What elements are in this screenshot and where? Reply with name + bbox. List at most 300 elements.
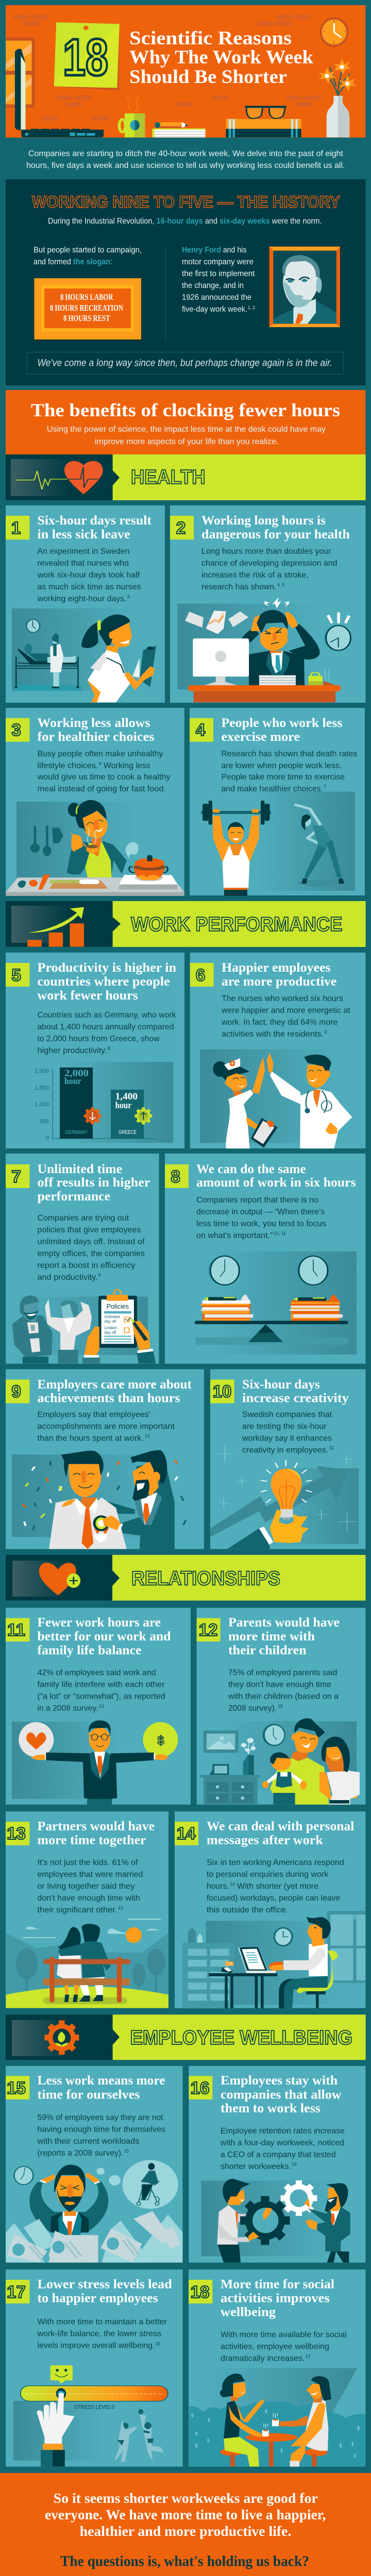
section title: RELATIONSHIPS bbox=[131, 1568, 280, 1590]
panel: card 12 bbox=[197, 1608, 366, 1805]
body text: family life interfere with each other bbox=[37, 1681, 165, 1689]
number badge bbox=[6, 516, 29, 539]
y axis labels: 1,500 bbox=[35, 1085, 49, 1091]
heading: We can deal with personal bbox=[207, 1820, 354, 1834]
body text bbox=[37, 1214, 145, 1282]
heading bbox=[37, 2278, 172, 2306]
body text bbox=[196, 1196, 326, 1240]
bar: Greece bbox=[111, 1090, 144, 1139]
number badge: 2 bbox=[176, 518, 185, 537]
body text: don't have enough time with bbox=[37, 1894, 140, 1903]
icon: heart with pulse bbox=[15, 461, 103, 494]
heading: We can do the same bbox=[196, 1162, 306, 1176]
heading bbox=[37, 961, 176, 1003]
title: Scientific Reasons bbox=[129, 28, 292, 49]
body text: Six in ten working Americans respond bbox=[207, 1858, 344, 1867]
body text: than the hours spent at work. bbox=[37, 1434, 144, 1443]
body text: It's not just the kids. 61% of bbox=[37, 1858, 138, 1867]
body text bbox=[221, 994, 350, 1039]
slogan lead text bbox=[33, 246, 142, 266]
section banner: employee wellbeing bbox=[6, 2014, 366, 2060]
body text: work. In fact, they did 64% more bbox=[221, 1018, 338, 1027]
y axis labels: 1,000 bbox=[35, 1101, 49, 1108]
body text bbox=[201, 547, 337, 591]
body text: 15 bbox=[118, 1905, 123, 1911]
heading: time for ourselves bbox=[37, 2088, 140, 2102]
heading: more time with bbox=[228, 1630, 315, 1643]
heading: dangerous for your health bbox=[201, 528, 350, 541]
number badge bbox=[197, 1618, 221, 1641]
number badge: 18 bbox=[191, 2282, 209, 2301]
illustration: light bulb idea bbox=[210, 1446, 359, 1549]
number badge bbox=[190, 718, 213, 742]
body text: Companies are trying out bbox=[37, 1214, 129, 1223]
panel: card 10 bbox=[210, 1369, 366, 1549]
body text: 15 bbox=[278, 1704, 283, 1709]
illustration: stress level slider bbox=[13, 2365, 168, 2467]
number badge: 16 bbox=[191, 2078, 209, 2097]
illustration: stress level slider: STRESS LEVELS bbox=[74, 2404, 114, 2411]
heading: Unlimited time bbox=[37, 1162, 122, 1176]
number badge: 13 bbox=[7, 1824, 26, 1843]
heading: Happier employees bbox=[222, 961, 331, 975]
illustration: employees and policy clipboard: day off bbox=[104, 1330, 116, 1335]
heading bbox=[37, 1616, 171, 1657]
body text: 75% of employed parents said bbox=[228, 1669, 337, 1677]
number badge: 6 bbox=[196, 965, 205, 985]
body text: are lower when people work less. bbox=[221, 761, 342, 770]
intro text: hours, five days a week and use science to tell us why working less could benefit us all. bbox=[26, 161, 345, 170]
closing question: The questions is, what's holding us back? bbox=[60, 2554, 309, 2570]
number badge bbox=[6, 1380, 29, 1403]
heading: Productivity is higher in bbox=[37, 961, 176, 975]
number badge: 9 bbox=[11, 1382, 21, 1401]
body text: revealed that nurses who bbox=[37, 559, 129, 568]
Henry Ford text: 1926 announced the bbox=[182, 293, 251, 302]
body text: work six-hour days took half bbox=[37, 571, 140, 580]
heading bbox=[37, 514, 152, 541]
number badge bbox=[210, 1380, 234, 1403]
panel: history bbox=[6, 179, 366, 385]
heading: are more productive bbox=[222, 975, 336, 989]
heading: More time for social bbox=[221, 2278, 334, 2292]
number badge bbox=[189, 2076, 212, 2099]
number badge bbox=[6, 1822, 29, 1845]
panel: card 4 bbox=[190, 708, 365, 896]
body text bbox=[37, 1011, 176, 1055]
body text: employees that were married bbox=[37, 1870, 143, 1879]
heading bbox=[37, 1820, 155, 1848]
title bbox=[129, 28, 313, 88]
bar: Germany: GERMANY bbox=[65, 1129, 88, 1136]
body text bbox=[37, 1411, 175, 1443]
panel: card 7 bbox=[6, 1154, 159, 1364]
illustration: man balancing heart and money: $ bbox=[157, 1734, 164, 1748]
heading: wellbeing bbox=[221, 2306, 276, 2319]
body text: With more time to maintain a better bbox=[37, 2318, 167, 2327]
body text: lifestyle choices. bbox=[37, 761, 98, 770]
heading bbox=[201, 514, 350, 541]
illustration: man at laptop with phone bbox=[182, 1911, 365, 2008]
subheading: improve more aspects of your life than you realize. bbox=[95, 437, 278, 446]
heading: working nine to five: WORKING NINE TO FIVE — THE HISTORY bbox=[32, 193, 340, 211]
body text: Countries such as Germany, who work bbox=[37, 1011, 176, 1020]
heading: in less sick leave bbox=[37, 528, 130, 541]
heading bbox=[242, 1378, 349, 1405]
heading: more time together bbox=[37, 1834, 146, 1848]
body text: with their children (based on a bbox=[228, 1692, 339, 1701]
heading: Less work means more bbox=[37, 2074, 165, 2088]
conclusion text: healthier and more productive life. bbox=[80, 2523, 291, 2539]
body text: activities, employee wellbeing bbox=[221, 2343, 329, 2351]
heading bbox=[37, 2074, 165, 2102]
body text bbox=[221, 2331, 347, 2363]
panel: card 16 bbox=[189, 2066, 366, 2263]
heading bbox=[221, 716, 343, 744]
body text: 7 bbox=[324, 784, 326, 790]
panel: card 9 bbox=[6, 1369, 204, 1549]
title: Should Be Shorter bbox=[129, 66, 287, 88]
section title: EMPLOYEE WELLBEING bbox=[130, 2027, 352, 2049]
body text: with a four-day workweek, noticed bbox=[220, 2139, 344, 2147]
Henry Ford text: five-day work week. bbox=[182, 305, 247, 314]
y axis labels: 500 bbox=[40, 1118, 49, 1125]
heading bbox=[228, 1616, 340, 1657]
section banner: health bbox=[6, 454, 366, 500]
intro text bbox=[26, 149, 345, 170]
quote box bbox=[27, 352, 343, 374]
bar: Greece: GREECE bbox=[119, 1129, 137, 1136]
body text: 2008 survey). bbox=[228, 1704, 277, 1713]
bar chart: annual hours Germany vs Greece bbox=[35, 1062, 173, 1143]
number badge: 4 bbox=[196, 720, 206, 739]
subheading bbox=[47, 425, 326, 446]
heading: increase creativity bbox=[242, 1392, 349, 1405]
slogan box: 8 HOURS LABOR bbox=[60, 292, 113, 302]
heading bbox=[222, 961, 336, 989]
body text: 16 bbox=[156, 2341, 161, 2347]
section banner: work performance bbox=[6, 901, 366, 947]
conclusion text: everyone. We have more time to live a happier, bbox=[45, 2507, 326, 2522]
illustration: nurse and doctor high five bbox=[200, 1049, 352, 1148]
number badge bbox=[190, 963, 214, 987]
panel: card 8 bbox=[165, 1154, 366, 1364]
body text: activities with the residents. bbox=[222, 1030, 324, 1039]
body text: 8 bbox=[107, 1046, 110, 1052]
body text: hours. bbox=[207, 1882, 229, 1891]
bar: Greece: 1,400 bbox=[115, 1091, 138, 1102]
heading bbox=[37, 1378, 192, 1405]
heading: performance bbox=[37, 1190, 110, 1204]
heading: for healthier choices bbox=[37, 730, 155, 744]
body text: People take more time to exercise bbox=[221, 773, 345, 782]
body text: they don't have enough time bbox=[228, 1681, 331, 1689]
number badge: 17 bbox=[7, 2282, 26, 2301]
panel: card 17 bbox=[6, 2269, 182, 2467]
body text: higher productivity. bbox=[37, 1046, 107, 1055]
y axis labels bbox=[35, 1068, 49, 1141]
body text: empty offices, the companies bbox=[37, 1249, 145, 1258]
y axis labels: 2,000 bbox=[35, 1068, 49, 1074]
heading: People who work less bbox=[221, 716, 343, 730]
panel: header bbox=[6, 5, 366, 138]
portrait: Henry Ford bbox=[269, 247, 340, 327]
body text: policies that give employees bbox=[37, 1226, 141, 1234]
number badge bbox=[6, 2280, 29, 2303]
body text: 59% of employees say they are not bbox=[37, 2113, 163, 2122]
illustration: couple on a bench bbox=[6, 1919, 168, 2008]
number badge: 8 bbox=[171, 1167, 180, 1186]
Henry Ford text: the change, and in bbox=[182, 281, 244, 290]
heading: companies that allow bbox=[221, 2088, 342, 2102]
heading: Lower stress levels lead bbox=[37, 2278, 172, 2292]
body text bbox=[220, 2127, 345, 2171]
heading: to happier employees bbox=[37, 2292, 158, 2306]
body text: a CEO of a company that tested bbox=[221, 2150, 336, 2159]
body text bbox=[37, 2113, 165, 2158]
section title: HEALTH bbox=[131, 466, 205, 488]
body text: 3 bbox=[324, 1029, 327, 1035]
body text bbox=[221, 750, 357, 793]
heading bbox=[221, 2074, 342, 2115]
bar: Germany: 2,000 bbox=[64, 1068, 89, 1079]
body text bbox=[37, 1858, 143, 1914]
number badge: 10 bbox=[213, 1382, 231, 1401]
body text: With shorter (yet more bbox=[237, 1882, 318, 1891]
body text: unlimited days off. Instead of bbox=[37, 1238, 145, 1246]
body text: Working less bbox=[104, 761, 150, 770]
body text: (reports a 2008 survey). bbox=[37, 2149, 124, 2158]
number badge: 12 bbox=[199, 1620, 217, 1639]
heading: Working less allows bbox=[37, 716, 150, 730]
body text: creativity in employees. bbox=[242, 1446, 328, 1455]
body text: accomplishments are more important bbox=[37, 1422, 175, 1431]
illustration: people exercising bbox=[201, 792, 355, 896]
heading: off results in higher bbox=[37, 1176, 150, 1190]
body text: 15 bbox=[292, 2162, 297, 2167]
illustration: office desk scene bbox=[6, 15, 357, 138]
heading: Parents would have bbox=[228, 1616, 340, 1630]
panel: card 11 bbox=[6, 1608, 191, 1805]
body text: decrease in output — “When there's bbox=[196, 1208, 325, 1216]
body text: working eight-hour days. bbox=[37, 595, 126, 603]
heading: Six-hour days bbox=[242, 1378, 320, 1392]
panel: card 14 bbox=[175, 1811, 366, 2008]
heading: countries where people bbox=[37, 975, 170, 989]
Henry Ford text bbox=[182, 246, 255, 314]
body text: 14 bbox=[230, 1882, 235, 1887]
icons: productivity gears bbox=[84, 1107, 152, 1125]
body text bbox=[37, 1669, 165, 1713]
heading: amount of work in six hours bbox=[196, 1176, 356, 1190]
body text: this outside the office. bbox=[207, 1906, 288, 1914]
body text: 3 bbox=[127, 594, 130, 600]
heading: The benefits of clocking fewer hours bbox=[31, 400, 340, 420]
illustration: man buried in paperwork bbox=[6, 2160, 183, 2263]
body text: An experiment in Sweden bbox=[37, 547, 130, 556]
heading: exercise more bbox=[221, 730, 300, 744]
Henry Ford text: the first to implement bbox=[182, 269, 255, 278]
title: Why The Work Week bbox=[129, 47, 313, 68]
panel: card 18 bbox=[189, 2269, 366, 2467]
illustration: employees and policy clipboard: Limited bbox=[104, 1325, 116, 1330]
illustration: woman cooking bbox=[6, 800, 184, 896]
number badge: 3 bbox=[11, 720, 21, 739]
body text: on what's important.” bbox=[196, 1231, 273, 1240]
illustration: employees and policy clipboard: Unlimited bbox=[104, 1314, 120, 1319]
body text: increases the risk of a stroke, bbox=[201, 571, 309, 580]
body text: Employers say that employees' bbox=[37, 1411, 150, 1419]
quote box: We've come a long way since then, but perhaps change again is in the air. bbox=[37, 358, 332, 369]
body text: Busy people often make unhealthy bbox=[37, 750, 163, 758]
slogan box: 8 HOURS REST bbox=[63, 313, 110, 323]
number badge bbox=[6, 2076, 29, 2099]
body text: chance of developing depression and bbox=[201, 559, 337, 568]
number badge: 15 bbox=[7, 2078, 26, 2097]
heading: Fewer work hours are bbox=[37, 1616, 161, 1630]
slogan lead text: But people started to campaign, bbox=[33, 246, 142, 255]
heading: them to work less bbox=[221, 2102, 321, 2115]
body text: less time to work, you tend to focus bbox=[196, 1219, 326, 1228]
illustration: nurse and patient bbox=[12, 608, 156, 702]
body text: Companies report that there is no bbox=[196, 1196, 318, 1205]
body text: Employee retention rates increase bbox=[221, 2127, 345, 2136]
body text: 9 bbox=[98, 1273, 101, 1278]
panel: card 2 bbox=[170, 505, 366, 703]
number badge: 7 bbox=[11, 1167, 21, 1186]
section banner: relationships bbox=[6, 1555, 366, 1601]
heading bbox=[207, 1820, 354, 1848]
body text: (“a lot” or “somewhat”), as reported bbox=[37, 1692, 165, 1701]
bar: Greece: hour bbox=[115, 1100, 131, 1110]
body text: as much sick time as nurses bbox=[37, 583, 141, 591]
heading: Working long hours is bbox=[201, 514, 326, 528]
illustration: employees and policy clipboard: day off bbox=[104, 1319, 116, 1324]
number badge: 11 bbox=[7, 1620, 25, 1639]
panel: card 3 bbox=[6, 708, 184, 896]
panel: card 13 bbox=[6, 1811, 168, 2008]
panel: card 5 bbox=[6, 953, 184, 1148]
heading bbox=[37, 716, 155, 744]
body text: workday say it enhances bbox=[242, 1434, 332, 1443]
heading: work fewer hours bbox=[37, 989, 138, 1003]
conclusion text bbox=[45, 2490, 326, 2539]
heading: Six-hour days result bbox=[37, 514, 152, 528]
body text: to 2,000 hours from Greece, show bbox=[37, 1035, 160, 1043]
icon: heart with plus bbox=[39, 1563, 80, 1596]
illustration: family at home bbox=[200, 1718, 360, 1805]
heading: Partners would have bbox=[37, 1820, 155, 1834]
body text: 13 bbox=[99, 1704, 104, 1709]
body text: about 1,400 hours annually compared bbox=[37, 1023, 174, 1031]
number badge: 14 bbox=[177, 1824, 196, 1843]
body text: 4, 5 bbox=[277, 582, 284, 588]
body text: were happier and more energetic at bbox=[221, 1006, 350, 1015]
heading: better for our work and bbox=[37, 1630, 171, 1643]
panel: card 1 bbox=[6, 505, 165, 703]
body text bbox=[37, 547, 141, 603]
y axis labels: 0 bbox=[46, 1135, 49, 1141]
body text: Long hours more than doubles your bbox=[201, 547, 331, 556]
body text: report a boost in efficiency bbox=[37, 1261, 135, 1270]
illustration: scale balancing work bbox=[194, 1251, 357, 1354]
body text: 17 bbox=[306, 2354, 311, 2360]
body text: research has shown. bbox=[201, 583, 276, 591]
body text: or living together said they bbox=[37, 1882, 134, 1891]
heading: activities improves bbox=[221, 2292, 330, 2306]
number badge: 1 bbox=[11, 518, 21, 537]
heading: Employers care more about bbox=[37, 1378, 192, 1392]
illustration: stressed man at desk bbox=[177, 597, 351, 702]
body text: would give us time to cook a healthy bbox=[37, 773, 171, 782]
illustration: two women at cafe bbox=[189, 2368, 365, 2467]
icon: gear with plant bbox=[44, 2021, 79, 2055]
body text: to personal enquiries during work bbox=[207, 1870, 329, 1879]
subheading: Using the power of science, the impact less time at the desk could have may bbox=[47, 425, 326, 434]
icon: rising bar chart bbox=[27, 907, 84, 947]
panel: card 15 bbox=[6, 2066, 183, 2263]
heading: Employees stay with bbox=[221, 2074, 338, 2088]
illustration: boss awarding employee bbox=[12, 1450, 185, 1549]
illustration: employees and policy clipboard bbox=[12, 1290, 156, 1364]
big number 18 on sticky note: 18 bbox=[63, 29, 108, 87]
body text bbox=[242, 1411, 334, 1455]
body text: levels improve overall wellbeing. bbox=[37, 2342, 155, 2350]
body text bbox=[37, 2318, 167, 2350]
heading: their children bbox=[228, 1643, 307, 1657]
body text: meal instead of going for fast food. bbox=[37, 785, 166, 793]
body text bbox=[207, 1858, 344, 1914]
body text: dramatically increases. bbox=[221, 2354, 305, 2363]
bar: Germany: hour bbox=[64, 1076, 81, 1086]
number badge bbox=[175, 1822, 198, 1845]
body text bbox=[228, 1669, 339, 1713]
body text: The nurses who worked six hours bbox=[222, 994, 343, 1003]
body text: focused) workdays, people can leave bbox=[207, 1894, 340, 1903]
Henry Ford text: motor company were bbox=[182, 258, 254, 266]
Henry Ford text: Henry Ford and his bbox=[182, 246, 246, 255]
illustration: man balancing heart and money bbox=[12, 1720, 178, 1805]
bar: Germany bbox=[60, 1067, 93, 1139]
heading: messages after work bbox=[207, 1834, 323, 1848]
body text: with their current workloads bbox=[37, 2137, 140, 2146]
illustration: two men fitting gears bbox=[201, 2179, 350, 2263]
number badge bbox=[6, 1164, 29, 1188]
body text: Swedish companies that bbox=[242, 1411, 332, 1419]
body text: work-life balance, the lower stress bbox=[37, 2330, 161, 2338]
illustration: employees and policy clipboard: Policies bbox=[107, 1302, 129, 1310]
slogan lead text: and formed the slogan: bbox=[33, 258, 112, 266]
conclusion text: So it seems shorter workweeks are good for bbox=[54, 2490, 318, 2506]
panel: card 6 bbox=[190, 953, 366, 1148]
body text: 42% of employees said work and bbox=[37, 1669, 156, 1677]
body text: 12 bbox=[145, 1433, 150, 1439]
number badge bbox=[170, 516, 194, 539]
body text: their significant other. bbox=[37, 1906, 117, 1914]
body text: 11 bbox=[329, 1445, 334, 1451]
number badge bbox=[189, 2280, 212, 2303]
heading: family life balance bbox=[37, 1643, 141, 1657]
number badge bbox=[6, 1618, 29, 1641]
body text: 15 bbox=[124, 2148, 129, 2154]
number badge bbox=[165, 1164, 189, 1188]
body text: having enough time for themselves bbox=[37, 2125, 165, 2134]
body text: Research has shown that death rates bbox=[221, 750, 357, 758]
heading bbox=[37, 1162, 150, 1204]
body text: are testing the six-hour bbox=[242, 1422, 327, 1431]
body text bbox=[37, 750, 171, 793]
number badge: 5 bbox=[11, 965, 21, 985]
